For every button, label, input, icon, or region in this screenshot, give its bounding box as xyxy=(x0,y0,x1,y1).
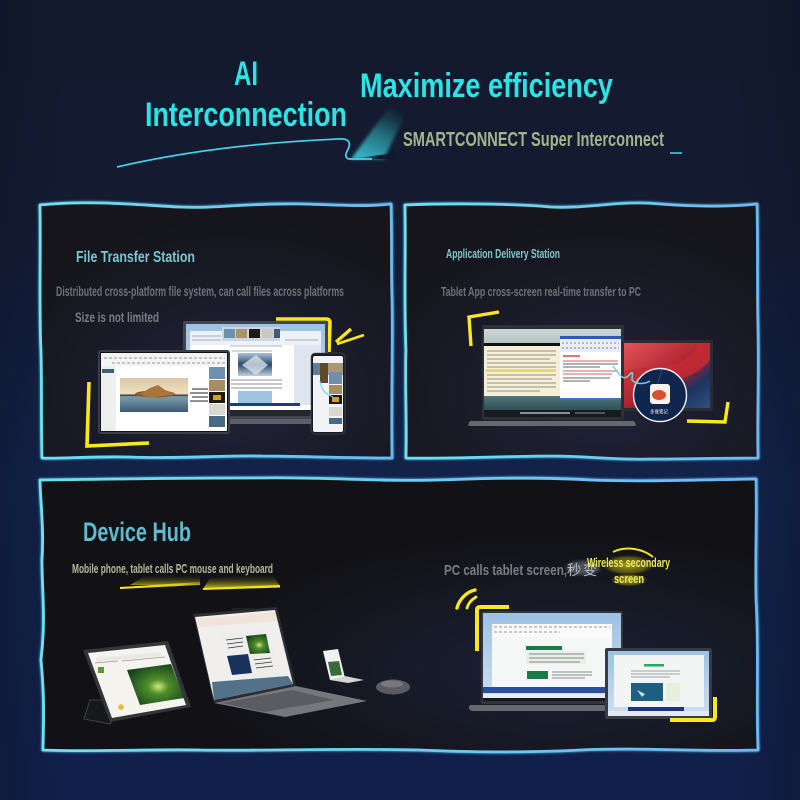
wireless secondary screen highlight: screen xyxy=(614,571,644,586)
text: description: Distributed cross-platform file system, can call files across platforms xyxy=(56,284,344,299)
header xyxy=(117,55,682,167)
tablet xyxy=(98,350,230,434)
panel frame xyxy=(40,478,758,752)
yellow bracket: bottom right xyxy=(687,402,728,422)
mouse xyxy=(376,680,410,694)
tablet on stand xyxy=(83,641,191,724)
app callout circle: 多维笔记 xyxy=(650,408,668,416)
app callout circle xyxy=(634,368,686,422)
text: description: Mobile phone, tablet calls PC mouse and keyboard xyxy=(72,562,273,576)
heading: Device Hub: Device Hub xyxy=(83,517,191,547)
laptop xyxy=(468,325,636,426)
yellow bracket: bottom right xyxy=(670,697,715,720)
text: seconds: 秒变 xyxy=(567,562,597,578)
yellow sparks xyxy=(336,329,364,344)
yellow bracket: top left xyxy=(469,312,499,346)
laptop xyxy=(183,321,328,424)
panel frame xyxy=(405,203,758,459)
panel: File Transfer Station xyxy=(40,203,392,458)
heading: File Transfer Station: File Transfer Station xyxy=(76,249,195,266)
laptop xyxy=(193,607,367,717)
decorative light beam and swoosh line xyxy=(117,100,682,167)
panel frame xyxy=(40,203,392,458)
wireless secondary screen highlight xyxy=(587,549,671,587)
wireless secondary screen highlight: Wireless secondary xyxy=(587,555,671,570)
phone xyxy=(311,353,345,434)
heading: Application Delivery Station: Application Delivery Station xyxy=(446,246,560,261)
yellow bracket: top left xyxy=(477,607,509,651)
text: size note: Size is not limited xyxy=(75,310,159,325)
panel: Device Hub xyxy=(40,478,758,752)
folding phone xyxy=(323,649,364,683)
blurred smudge xyxy=(566,561,600,575)
title: AI Interconnection: Interconnection xyxy=(145,96,347,134)
tablet with red wallpaper xyxy=(618,340,713,411)
text: PC calls tablet screen: PC calls tablet screen, xyxy=(444,562,567,579)
heading: Maximize efficiency: Maximize efficiency xyxy=(360,67,613,105)
title: AI Interconnection: AI xyxy=(234,55,258,93)
text: description: Tablet App cross-screen real-time transfer to PC xyxy=(441,284,641,299)
wifi icon xyxy=(457,590,476,608)
yellow underline bands xyxy=(120,574,280,590)
laptop xyxy=(469,611,623,711)
yellow bracket: top right xyxy=(276,319,330,352)
yellow bracket: bottom left xyxy=(87,382,149,446)
tablet xyxy=(605,648,712,719)
subtitle: SMARTCONNECT Super Interconnect: SMARTCONNECT Super Interconnect xyxy=(403,129,664,151)
transfer arrow xyxy=(613,366,650,384)
title: AI Interconnection xyxy=(145,55,347,134)
panel: Application Delivery Station xyxy=(405,203,758,459)
